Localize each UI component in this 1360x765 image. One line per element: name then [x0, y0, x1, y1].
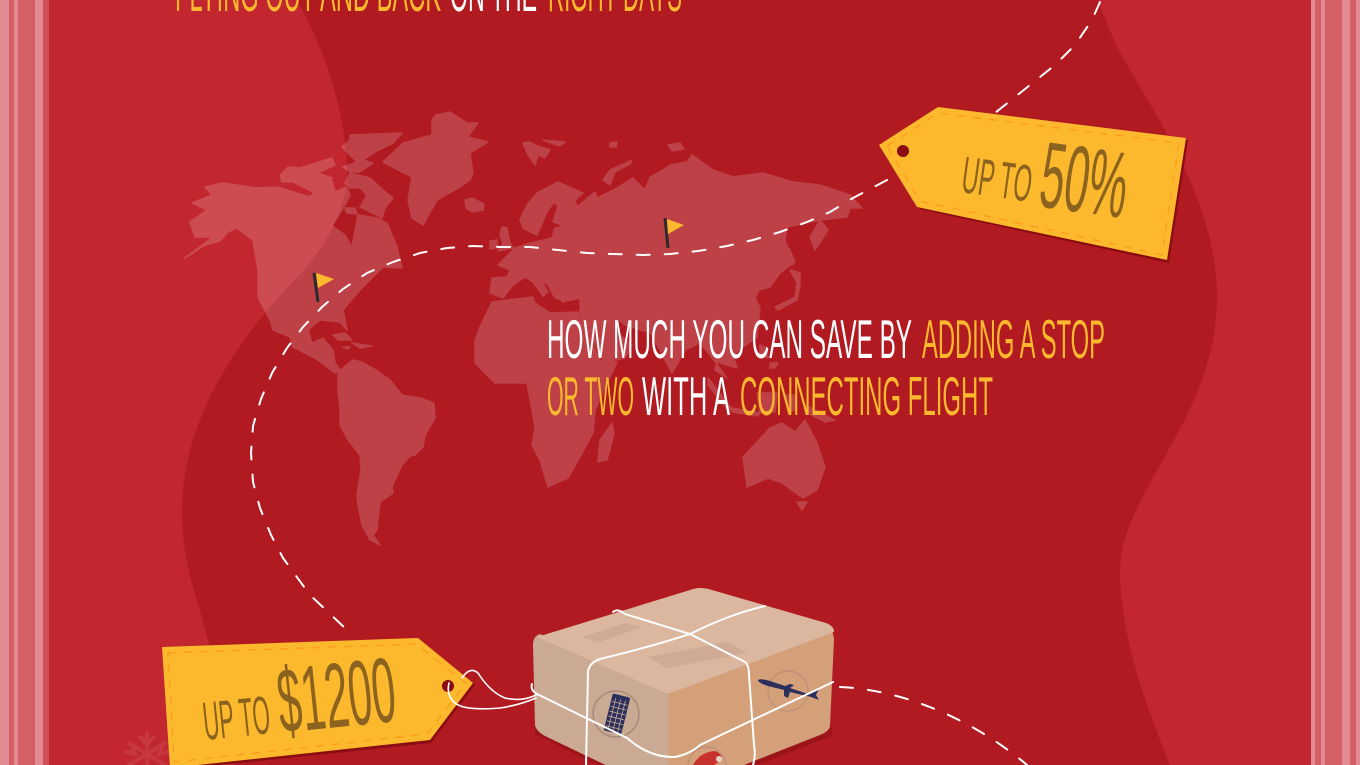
- map: Australia: [743, 420, 825, 510]
- package: left face: [533, 634, 668, 765]
- body text: how much you can save: [547, 308, 1105, 427]
- right striped border: [1311, 0, 1360, 765]
- map: Japan and Sakhalin: [775, 248, 800, 310]
- map: Eurasia: [490, 155, 862, 378]
- map: Madagascar: [598, 423, 614, 462]
- flag: Russia: [665, 218, 684, 248]
- world map: [185, 112, 862, 545]
- map: Greenland: [383, 112, 488, 225]
- text: ADDING A STOP: [922, 308, 1105, 370]
- dashed flight route from top to tag: [995, 2, 1100, 113]
- dashed flight route leaving package: [840, 687, 1027, 765]
- price tag: up to 50%: UP TO: [958, 146, 1036, 214]
- price tag: up to $1200: UP TO: [200, 685, 273, 752]
- flag: North America: [314, 273, 334, 302]
- body text: how much you can save: OR TWO: [547, 365, 634, 427]
- price tag: up to $1200: [162, 638, 475, 765]
- package: top face: [537, 588, 834, 694]
- package: tape patch: [648, 642, 747, 668]
- map: Africa: [475, 297, 617, 487]
- string tying tag to package: [448, 670, 536, 709]
- body text: how much you can save: CONNECTING FLIGHT: [740, 365, 993, 427]
- package: shadow: [535, 728, 832, 765]
- left striped border: [0, 0, 49, 765]
- map: Arctic Russian islands: [523, 140, 684, 185]
- dashed flight route across the map: [251, 180, 887, 628]
- icon: snowflake: [126, 733, 168, 765]
- price tag: up to $1200: $1200: [272, 639, 400, 753]
- price tag: up to 50%: [879, 107, 1188, 263]
- package: right face: [668, 628, 834, 765]
- map: Arctic islands: [280, 133, 402, 218]
- package: white string: [532, 606, 833, 765]
- dark red background blob: [182, 0, 1217, 765]
- body text: how much you can save: HOW MUCH YOU CAN SAVE BY: [547, 308, 912, 370]
- map: British Isles: [490, 227, 513, 251]
- icon: santa hat sticker: [688, 747, 726, 765]
- map: Indonesia and Philippines: [708, 345, 835, 422]
- price tag: up to 50%: 50%: [1034, 122, 1135, 238]
- map: South America: [338, 360, 435, 545]
- map: Caribbean islands: [333, 333, 372, 349]
- cardboard package: [532, 588, 834, 765]
- icon: airplane sticker: [758, 671, 820, 711]
- map: North and Central America: [185, 181, 402, 373]
- package: tape patch: [582, 623, 642, 643]
- map: Iceland: [465, 198, 484, 212]
- body text: how much you can save: WITH A: [642, 365, 730, 427]
- icon: phone sticker: [593, 691, 639, 737]
